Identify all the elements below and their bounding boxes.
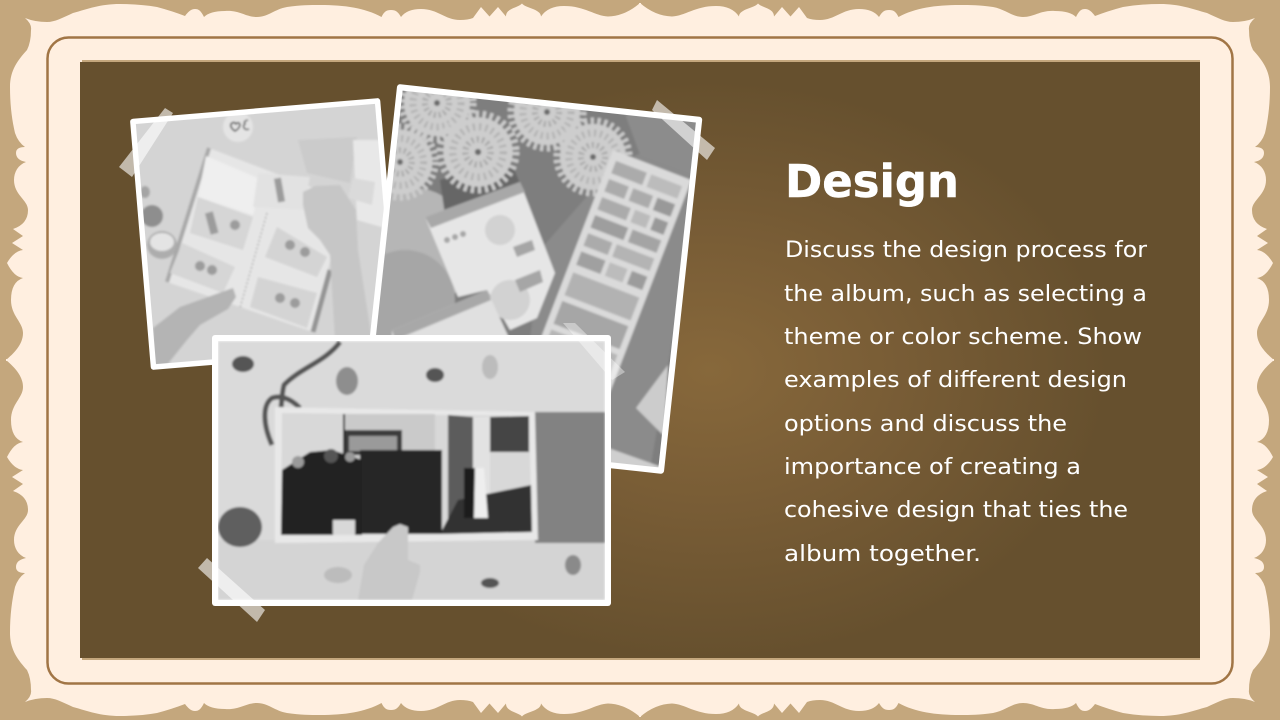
body text: the album, such as selecting a <box>784 281 1147 307</box>
items at top right <box>298 137 385 228</box>
flower pot <box>140 186 177 259</box>
photo: flowers and sticker books <box>370 84 702 474</box>
round badge <box>223 112 253 142</box>
pompom flowers <box>392 91 634 201</box>
sticker sheet with patterns <box>540 150 690 394</box>
body text: cohesive design that ties the <box>784 497 1128 523</box>
lower hand <box>153 288 236 365</box>
tape upper right of third photo <box>563 323 625 380</box>
hand <box>358 524 420 600</box>
body text: theme or color scheme. Show <box>784 324 1142 350</box>
tape on second photo <box>652 100 715 160</box>
tape on first photo <box>119 108 173 177</box>
tape lower left of third photo <box>198 558 265 622</box>
body text: Discuss the design process for <box>785 237 1148 263</box>
small sheet corner <box>636 365 668 436</box>
heading: Design <box>785 155 959 208</box>
photo: wedding print in album on linen <box>212 335 611 606</box>
white print <box>275 407 538 543</box>
ribbon <box>265 342 340 445</box>
body text: options and discuss the <box>784 411 1067 437</box>
album <box>167 148 345 332</box>
sticker book <box>392 182 555 340</box>
body text: importance of creating a <box>784 454 1081 480</box>
dark leaf <box>218 507 262 547</box>
knit fabric <box>376 115 696 462</box>
body text: album together. <box>784 541 981 567</box>
upper hand <box>303 185 372 340</box>
grey felt page <box>535 412 605 543</box>
print image <box>281 413 532 535</box>
brown content panel <box>80 60 1200 660</box>
body text <box>784 237 1148 567</box>
body text: examples of different design <box>784 367 1127 393</box>
photo: sticker album held in hands <box>130 98 387 370</box>
dried flowers <box>232 355 581 588</box>
